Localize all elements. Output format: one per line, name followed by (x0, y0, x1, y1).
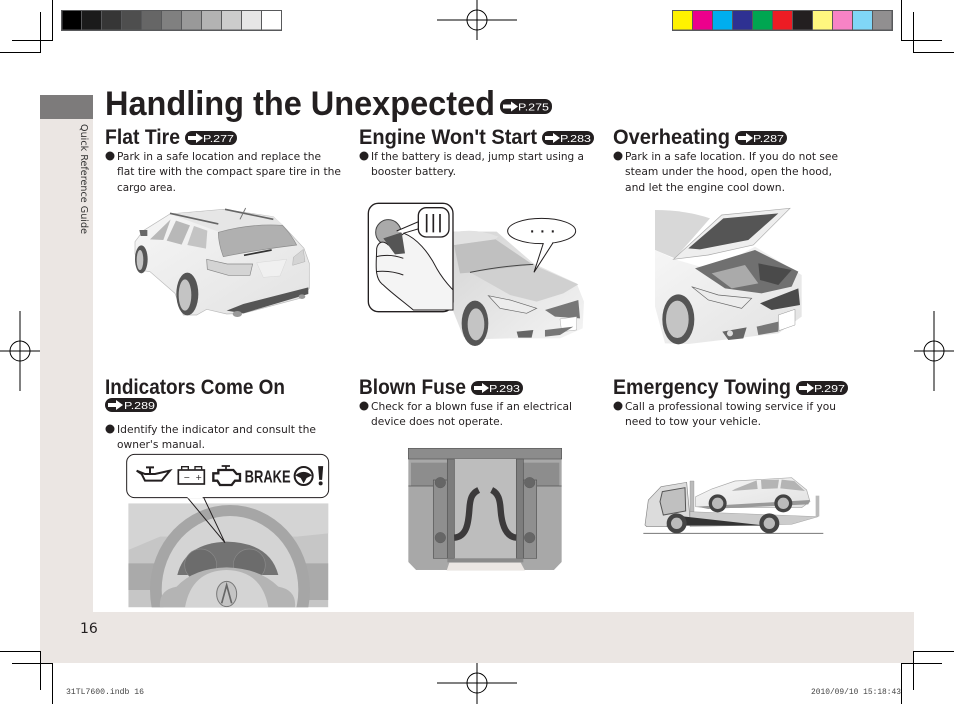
panel: blown fuse: Blown Fuse (359, 375, 466, 399)
panel: flat tire: Park in a safe location and replace the (117, 150, 321, 163)
illustration: blown fuse (408, 448, 562, 571)
page number: 16 (80, 621, 98, 637)
panel: blown fuse (359, 375, 572, 571)
panel: flat tire: Flat Tire (105, 125, 180, 149)
process colour bar (672, 10, 893, 31)
illustration: car with open hood (655, 208, 802, 344)
panel: emergency towing: Call a professional towing service if you (625, 400, 836, 413)
panel: indicators come on (105, 378, 330, 608)
panel: overheating: P.287 (753, 134, 785, 145)
panel: blown fuse: P.293 (489, 384, 521, 395)
panel: flat tire: flat tire with the compact spare tire in the (117, 165, 341, 178)
illustration: tow truck carrying car (643, 478, 823, 533)
panel: flat tire: cargo area. (117, 181, 176, 194)
panel: indicators come on: P.289 (124, 401, 156, 412)
panel: engine won't start: booster battery. (371, 165, 456, 178)
panel: emergency towing: need to tow your vehicle. (625, 415, 761, 428)
panel: engine won't start: P.283 (560, 134, 592, 145)
sidebar tab (40, 95, 93, 119)
panel: blown fuse: device does not operate. (371, 415, 503, 428)
panel: emergency towing (613, 375, 848, 533)
panel: engine won't start: If the battery is dead, jump start using a (371, 150, 584, 163)
callout: warning indicators: − (183, 473, 190, 482)
illustration: station wagon rear view (135, 208, 309, 317)
grayscale colour bar (61, 10, 282, 31)
callout: warning indicators: + (195, 473, 202, 482)
panel: overheating: steam under the hood, open the hood, (625, 165, 832, 178)
inset: key in ignition (368, 203, 453, 312)
panel: indicators come on: Identify the indicator and consult the (117, 423, 316, 436)
speech bubble: ... (530, 221, 561, 235)
page background band (40, 119, 914, 663)
panel: overheating: and let the engine cool down. (625, 181, 785, 194)
panel: engine won't start (359, 125, 594, 346)
sidebar label: Quick Reference Guide (78, 124, 89, 234)
panel: overheating (613, 125, 838, 344)
speech bubble (508, 218, 576, 272)
panel: overheating: Park in a safe location. If you do not see (625, 150, 838, 163)
title: Handling the Unexpected (105, 85, 495, 123)
panel: blown fuse: Check for a blown fuse if an electrical (371, 400, 572, 413)
print slug left: 31TL7600.indb 16 (66, 688, 144, 697)
panel: engine won't start: Engine Won't Start (359, 125, 537, 149)
panel: overheating: Overheating (613, 125, 730, 149)
panel: flat tire (105, 125, 341, 317)
panel: emergency towing: P.297 (814, 384, 846, 395)
callout: warning indicators: BRAKE (245, 466, 291, 486)
illustration: steering wheel and warning lights (126, 454, 330, 608)
panel: indicators come on: owner's manual. (117, 438, 205, 451)
panel: indicators come on: Indicators Come On (105, 375, 285, 399)
title: P.275 (518, 102, 550, 114)
illustration: car front with key and speech bubble (368, 203, 584, 346)
panel: flat tire: P.277 (203, 134, 235, 145)
panel: emergency towing: Emergency Towing (613, 375, 791, 399)
callout: warning indicators (127, 454, 329, 543)
print slug right: 2010/09/10 15:18:43 (811, 688, 901, 697)
